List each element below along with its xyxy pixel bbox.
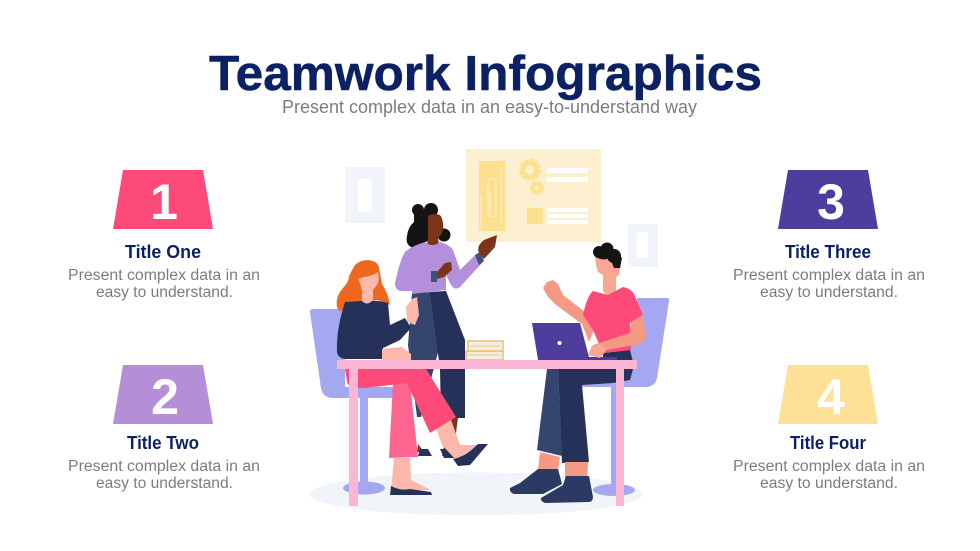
text block: item one description xyxy=(68,267,260,301)
man trousers xyxy=(537,350,633,463)
books xyxy=(466,341,503,360)
floor shadow xyxy=(310,472,642,516)
badge: number 4: 4 xyxy=(817,369,845,425)
text block: item two description xyxy=(68,458,260,492)
woman neck and face xyxy=(427,214,443,248)
text block: item three description xyxy=(733,267,925,301)
man arm raised xyxy=(543,280,594,342)
badge: number 1: 1 xyxy=(150,174,178,230)
heading: title four: Title Four xyxy=(790,433,866,453)
hair xyxy=(337,260,390,311)
presentation board xyxy=(466,149,601,242)
woman trousers xyxy=(408,291,465,418)
man shirt xyxy=(583,287,643,353)
text block: item three description: easy to understand. xyxy=(760,284,898,301)
badge: number 2: 2 xyxy=(151,369,179,425)
sweater xyxy=(337,301,411,359)
woman cuffs xyxy=(431,252,484,282)
badge: number 1 xyxy=(113,170,213,230)
badge: number 3: 3 xyxy=(817,174,845,230)
panel: item one xyxy=(68,170,260,301)
chair left xyxy=(310,309,397,494)
text block: item four description: Present complex data in an xyxy=(733,458,925,475)
panel: item four xyxy=(733,365,925,492)
person: man seated xyxy=(510,242,646,503)
text block: item two description: easy to understand. xyxy=(96,475,233,492)
illustration: team at table xyxy=(310,149,669,516)
man shoes xyxy=(510,469,593,503)
person: seated woman xyxy=(337,260,488,495)
man neck and face xyxy=(595,254,620,297)
woman feet xyxy=(417,418,460,458)
badge: number 4 xyxy=(778,365,878,425)
raised hand xyxy=(406,297,419,325)
heading: title one: Title One xyxy=(125,242,201,262)
text block: item four description xyxy=(733,458,925,492)
wall frame right xyxy=(628,224,658,267)
woman sweater xyxy=(395,242,482,294)
table xyxy=(337,360,637,506)
person: standing woman xyxy=(395,203,497,458)
text block: item three description: Present complex data in an xyxy=(733,267,925,284)
chair right xyxy=(582,298,669,496)
text block: item one description: Present complex data in an xyxy=(68,267,260,284)
text block: item two description: Present complex data in an xyxy=(68,458,260,475)
heading: title three: Title Three xyxy=(785,242,871,262)
man hair xyxy=(593,242,622,268)
man ankles xyxy=(538,452,588,478)
man arm front xyxy=(589,315,646,358)
panel: item three xyxy=(733,170,925,301)
woman hair xyxy=(407,203,450,248)
text block: item four description: easy to understand. xyxy=(760,475,898,492)
shoes xyxy=(390,444,488,495)
badge: number 2 xyxy=(113,365,213,425)
heading: title two: Title Two xyxy=(127,433,199,453)
text block: item one description: easy to understand. xyxy=(96,284,233,301)
subtitle: Present complex data in an easy-to-understand way xyxy=(282,97,697,117)
title: Teamwork Infographics xyxy=(209,47,762,101)
legs xyxy=(345,369,478,490)
badge: number 3 xyxy=(778,170,878,230)
resting forearm xyxy=(382,347,411,360)
woman hands xyxy=(437,235,497,279)
wall frame left xyxy=(345,167,385,223)
laptop xyxy=(532,323,617,360)
face and neck xyxy=(358,272,379,304)
panel: item two xyxy=(68,365,260,492)
